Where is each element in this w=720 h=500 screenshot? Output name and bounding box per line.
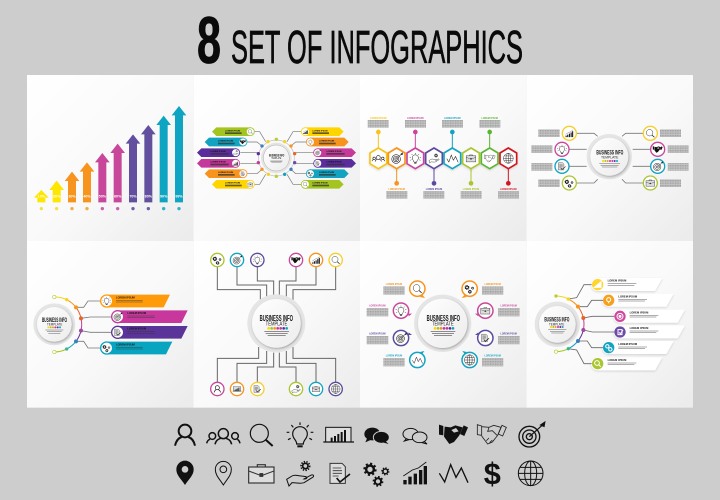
marker dots [40, 207, 181, 210]
node text blocks [531, 129, 689, 187]
connectors [568, 285, 614, 364]
icon: light bulb [287, 422, 313, 446]
icon: hand with gear [287, 462, 314, 486]
ribbon labels: LOREM IPSUM [608, 279, 627, 283]
ribbon labels: LOREM IPSUM [630, 310, 649, 314]
icon strip [175, 422, 545, 491]
node text blocks [367, 286, 520, 366]
bar labels [116, 295, 147, 346]
connectors [240, 132, 314, 184]
panel: hub with white ribbons [526, 241, 693, 408]
ribbon labels: LOREM IPSUM [210, 162, 226, 164]
central hub: BUSINESS INFO [544, 318, 570, 324]
icon: gears [364, 464, 389, 486]
ribbon labels: LOREM IPSUM [225, 130, 240, 132]
node titles: LOREM IPSUM [369, 306, 386, 308]
panel: hub with speech nodes [360, 241, 526, 408]
hexagon step titles: LOREM IPSUM [463, 189, 479, 191]
hub with ring dots: BUSINESS INFO [269, 153, 285, 157]
bar labels: LOREM IPSUM [127, 311, 147, 315]
hexagon step titles: LOREM IPSUM [444, 118, 461, 120]
icon: magnifier [250, 424, 273, 446]
percentage labels: 90% [160, 195, 168, 199]
colored arc [54, 297, 82, 352]
percentage labels [38, 195, 183, 199]
ribbon text lines [608, 283, 658, 365]
central hub: TEMPLATE [47, 323, 63, 327]
hexagon step titles: LOREM IPSUM [481, 118, 498, 120]
ribbon labels: LOREM IPSUM [326, 151, 342, 153]
panel: hexagon timeline [360, 75, 526, 241]
hexagon step titles: LOREM IPSUM [407, 118, 424, 120]
icon: briefcase [249, 465, 274, 483]
hexagon step titles: LOREM IPSUM [388, 189, 405, 191]
node icons [213, 256, 340, 393]
percentage labels: 20% [53, 195, 61, 199]
central hub: TEMPLATE [549, 322, 565, 326]
node tails [408, 294, 478, 354]
panel: rising arrows chart [27, 75, 193, 241]
bar labels: LOREM IPSUM [116, 295, 136, 299]
central hub: BUSINESS INFO [427, 313, 460, 323]
panel: ribbon hub [193, 75, 360, 241]
node icons [396, 285, 490, 365]
icon: chart board [323, 427, 354, 442]
central hub: BUSINESS INFO [42, 318, 67, 324]
title [197, 3, 523, 77]
stems and nodes [378, 132, 508, 183]
central hub [587, 134, 632, 179]
ribbon labels: LOREM IPSUM [218, 141, 233, 143]
ribbon labels: LOREM IPSUM [618, 294, 638, 298]
node titles: LOREM IPSUM [500, 334, 517, 336]
icon: dollar: $ [484, 457, 501, 491]
percentage labels: 80% [145, 195, 153, 199]
panel: circle hub with eight nodes [526, 75, 693, 241]
node titles [369, 284, 517, 358]
hub with ring dots [257, 138, 296, 178]
central hub: BUSINESS INFO [260, 313, 293, 323]
central hub [414, 295, 471, 352]
ribbon icon discs [592, 279, 626, 369]
icon: filled handshake [439, 425, 468, 444]
connectors [76, 301, 112, 348]
ribbon labels: LOREM IPSUM [312, 183, 328, 185]
hexagon step titles: LOREM IPSUM [426, 189, 442, 191]
ribbon labels: LOREM IPSUM [630, 326, 649, 330]
ribbon labels: LOREM IPSUM [319, 141, 334, 143]
ribbon labels: LOREM IPSUM [319, 172, 334, 174]
node titles: LOREM IPSUM [484, 356, 501, 358]
colored arc [556, 296, 584, 352]
bar text lines [116, 300, 155, 349]
ribbon labels: LOREM IPSUM [608, 358, 627, 362]
panel: hub with slanted bars [27, 241, 193, 408]
ribbon labels: LOREM IPSUM [210, 151, 226, 153]
left ribbons [197, 127, 251, 189]
ribbon labels [608, 279, 649, 362]
node icons [557, 129, 663, 187]
node titles: LOREM IPSUM [386, 356, 402, 358]
arrow bars 10% to 100% [34, 106, 186, 202]
icon: globe [518, 461, 543, 486]
bar icons [102, 297, 122, 352]
arc dots [554, 294, 585, 353]
slanted bars [107, 295, 188, 354]
bar icon circles [101, 295, 124, 354]
node circles [555, 126, 665, 190]
node circles [393, 281, 493, 368]
icon: zigzag line [439, 465, 468, 483]
node titles: LOREM IPSUM [500, 306, 517, 308]
hexagons [370, 148, 517, 169]
icon: target [519, 422, 545, 447]
stem dots [376, 130, 511, 186]
bar labels: LOREM IPSUM [116, 342, 136, 346]
percentage labels: 50% [99, 195, 107, 199]
icon: outline handshake [477, 425, 506, 444]
node circles [211, 253, 342, 396]
node titles: LOREM IPSUM [386, 284, 402, 286]
icon: group [207, 429, 240, 444]
percentage labels: 60% [114, 195, 122, 199]
ribbon labels: LOREM IPSUM [312, 130, 328, 132]
ribbon labels: LOREM IPSUM [326, 162, 342, 164]
title: 8 [197, 3, 221, 77]
icon: outline pin [215, 461, 231, 485]
tree connectors [217, 267, 336, 382]
bar labels: LOREM IPSUM [127, 327, 147, 331]
white ribbons [591, 278, 685, 370]
arc dots [53, 295, 83, 354]
hub with ring dots: TEMPLATE [271, 157, 282, 160]
connectors [569, 133, 651, 183]
percentage labels: 10% [38, 195, 46, 199]
white disc icons [594, 282, 623, 367]
hexagon text blocks [368, 120, 519, 199]
panel: hub tree with twelve nodes [193, 241, 360, 408]
ribbon text lines [210, 132, 345, 186]
node titles: LOREM IPSUM [484, 284, 501, 286]
icon: bar growth [403, 462, 427, 484]
central hub: BUSINESS INFO [596, 150, 623, 157]
ribbon icons [232, 128, 322, 188]
hexagon icons [372, 153, 513, 163]
icon: filled chat [364, 428, 389, 444]
central hub: TEMPLATE [432, 322, 454, 328]
central hub [535, 302, 580, 347]
ribbon labels: LOREM IPSUM [618, 342, 638, 346]
central hub [33, 303, 75, 345]
icon: filled pin [176, 461, 194, 485]
central hub [247, 294, 305, 352]
ribbon labels [210, 130, 342, 185]
icon: person [175, 425, 195, 446]
hexagon step titles: LOREM IPSUM [370, 118, 387, 120]
right ribbons [305, 127, 356, 189]
percentage labels: 70% [129, 195, 137, 199]
hexagon step titles [370, 118, 517, 191]
central hub: TEMPLATE [601, 155, 619, 160]
ribbon labels: LOREM IPSUM [225, 183, 240, 185]
node titles: LOREM IPSUM [369, 334, 386, 336]
icon: outline chat [403, 428, 427, 444]
ribbon labels: LOREM IPSUM [218, 172, 233, 174]
percentage labels: 99% [175, 195, 183, 199]
percentage labels: 30% [68, 195, 76, 199]
hexagon step titles: LOREM IPSUM [500, 189, 517, 191]
central hub: TEMPLATE [266, 322, 288, 328]
percentage labels: 40% [83, 195, 91, 199]
icon: document check [330, 463, 350, 483]
